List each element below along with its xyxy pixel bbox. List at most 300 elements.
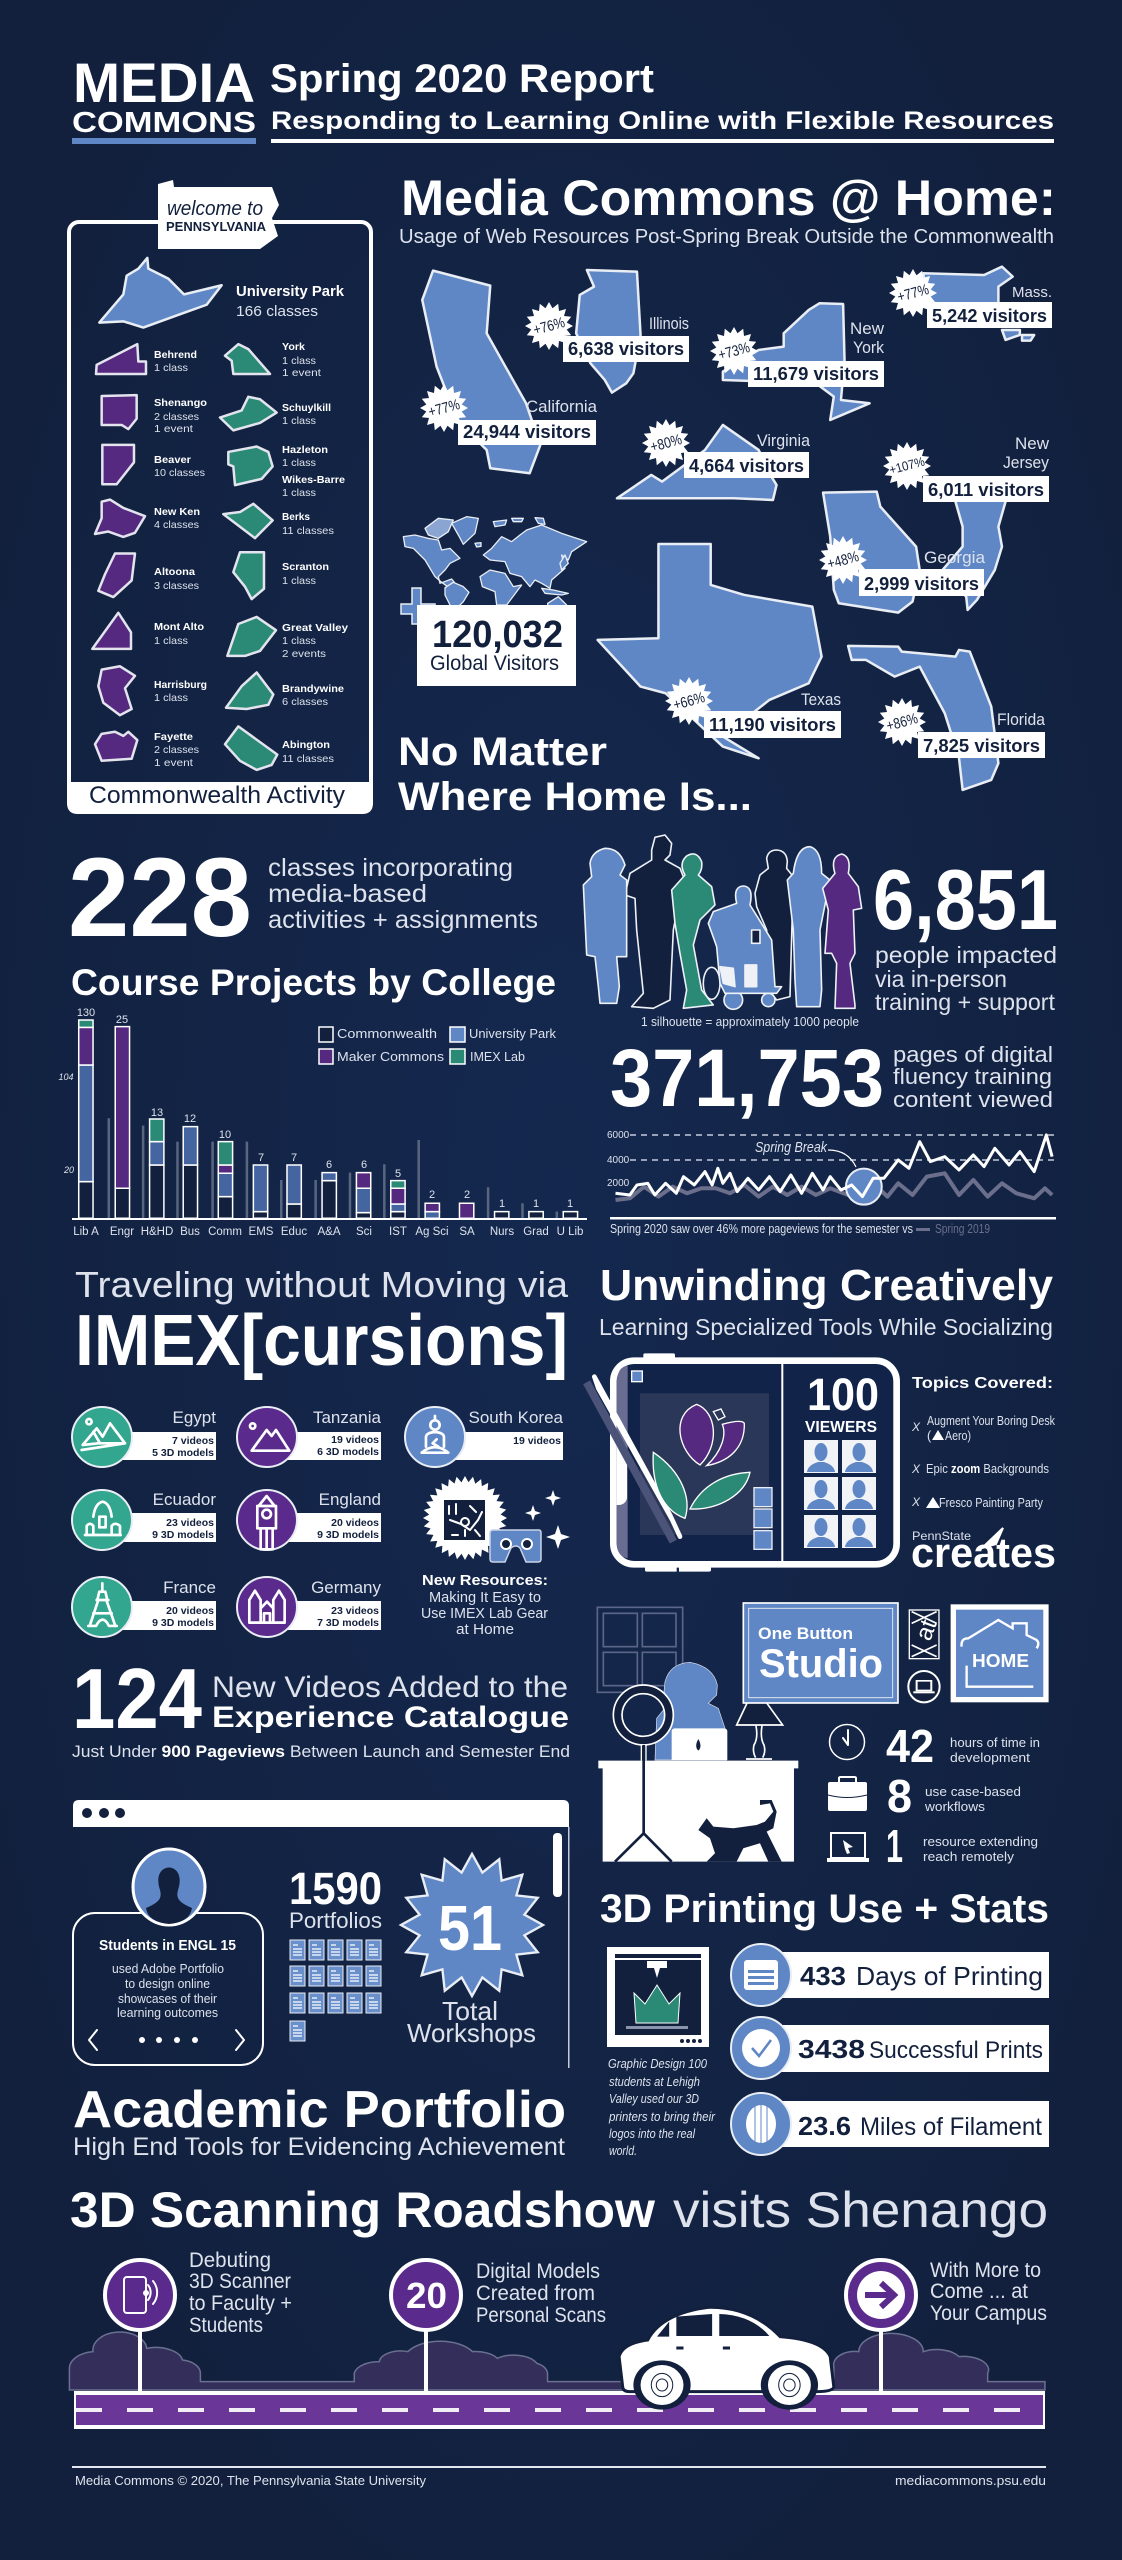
road signs bbox=[105, 2249, 1047, 2392]
value labels: 1 bbox=[533, 1198, 539, 1210]
heading: no matter where home is bbox=[398, 730, 752, 819]
france: 20 videos bbox=[166, 1605, 214, 1617]
campus labels: 1 class bbox=[282, 355, 316, 367]
campus labels: Abington bbox=[282, 739, 330, 751]
window bbox=[597, 1607, 683, 1692]
days of printing: 433 bbox=[800, 1961, 846, 1991]
heading: media commons at home: Usage of Web Resources Post-Spring Break Outside the Commonwealth bbox=[399, 226, 1054, 248]
heading: academic portfolio: High End Tools for Evidencing Achievement bbox=[73, 2133, 565, 2161]
heading: unwinding creatively: Learning Specialized Tools While Socializing bbox=[599, 1314, 1053, 1340]
printing stats bbox=[731, 1944, 1049, 2155]
topics covered: X bbox=[911, 1420, 921, 1434]
college labels: EMS bbox=[249, 1226, 274, 1238]
illinois: Illinois bbox=[649, 314, 689, 333]
heading: course projects: Course Projects by College bbox=[71, 962, 556, 1003]
new jersey: 6,011 visitors bbox=[928, 480, 1044, 500]
studio stats: development bbox=[950, 1750, 1030, 1765]
stat: 1590 portfolios bbox=[289, 1863, 382, 2041]
studio stats: resource extending bbox=[923, 1834, 1038, 1849]
campus labels: 1 event bbox=[154, 757, 193, 769]
studio stats: use case-based bbox=[925, 1784, 1021, 1799]
new resources: Making It Easy to bbox=[429, 1589, 541, 1606]
college labels: Nurs bbox=[490, 1226, 514, 1238]
virginia bbox=[642, 419, 811, 478]
value labels: 104 bbox=[58, 1072, 74, 1082]
world map bbox=[403, 517, 587, 617]
germany: 23 videos bbox=[331, 1605, 379, 1617]
college labels: Engr bbox=[110, 1226, 134, 1238]
stat: 228 classes: 228 bbox=[68, 835, 252, 960]
sign: more to come: Your Campus bbox=[930, 2302, 1047, 2325]
line chart: 4000 bbox=[607, 1155, 630, 1166]
icon: tulip bbox=[653, 1404, 750, 1518]
stat: 228 classes: classes incorporating bbox=[268, 854, 513, 882]
value labels bbox=[58, 1007, 573, 1210]
profile card: to design online bbox=[125, 1976, 210, 1991]
campus labels: 2 events bbox=[282, 648, 326, 660]
printer caption: Graphic Design 100 bbox=[608, 2056, 708, 2071]
campus labels: Brandywine bbox=[282, 683, 344, 695]
legend bbox=[319, 1026, 556, 1064]
lamp bbox=[737, 1698, 783, 1759]
welcome sign: welcome to bbox=[167, 198, 263, 220]
sign: more to come: With More to bbox=[930, 2259, 1041, 2282]
stat: 124 videos: Just Under 900 Pageviews Between Launch and Semester End bbox=[72, 1742, 570, 1761]
legend: IMEX Lab bbox=[470, 1049, 525, 1064]
value labels: 2 bbox=[464, 1189, 470, 1201]
stat: 6851 people: 6,851 bbox=[873, 853, 1058, 948]
heading: no matter where home is: Where Home Is... bbox=[398, 775, 752, 819]
printer caption bbox=[608, 2056, 716, 2158]
line chart: Spring Break bbox=[755, 1139, 828, 1156]
profile card: showcases of their bbox=[118, 1991, 218, 2006]
state callouts bbox=[420, 269, 1052, 758]
printer illustration bbox=[607, 1947, 709, 2047]
car bbox=[619, 2307, 834, 2410]
value labels: 7 bbox=[258, 1152, 264, 1164]
global visitors: 120,032 bbox=[432, 614, 563, 656]
egypt: Egypt bbox=[173, 1408, 216, 1427]
studio stats: 42 bbox=[886, 1720, 934, 1772]
caption: scanner: 3D Scanner bbox=[189, 2270, 291, 2293]
campus labels: 11 classes bbox=[282, 525, 334, 537]
campus labels: 1 class bbox=[282, 457, 316, 469]
legend: Maker Commons bbox=[337, 1049, 445, 1064]
college labels: Bus bbox=[180, 1226, 200, 1238]
successful prints: 3438 bbox=[798, 2034, 865, 2064]
stat: 6851 people: via in-person bbox=[875, 966, 1007, 992]
england: 9 3D models bbox=[317, 1529, 379, 1541]
value labels: 1 bbox=[499, 1198, 505, 1210]
tanzania: 6 3D models bbox=[317, 1446, 379, 1458]
global visitors: Global Visitors bbox=[430, 652, 559, 675]
topics covered: PennState bbox=[912, 1529, 971, 1543]
heading: imexcursions: Traveling without Moving via bbox=[75, 1264, 569, 1305]
line chart: 6000 bbox=[607, 1130, 630, 1141]
new york bbox=[710, 319, 885, 387]
new resources: at Home bbox=[456, 1621, 514, 1638]
value labels: 130 bbox=[77, 1007, 95, 1019]
value labels: 1 bbox=[567, 1198, 573, 1210]
sign: 20 models: Created from bbox=[476, 2282, 595, 2305]
egypt bbox=[72, 1407, 216, 1467]
icon: briefcase bbox=[828, 1777, 867, 1811]
printer caption: Valley used our 3D bbox=[609, 2091, 699, 2106]
sign: 3d scanner bbox=[105, 2260, 175, 2392]
header logo: COMMONS bbox=[72, 107, 256, 139]
stat: 6851 people: people impacted bbox=[875, 942, 1057, 968]
welcome sign: PENNSYLVANIA bbox=[166, 219, 267, 234]
stat: 228 classes bbox=[68, 835, 538, 960]
heading: academic portfolio: Academic Portfolio bbox=[73, 2081, 566, 2139]
florida: Florida bbox=[997, 710, 1045, 729]
campus labels: 1 class bbox=[282, 487, 316, 499]
new york: 11,679 visitors bbox=[753, 364, 879, 384]
heading: 3d scanning roadshow: visits Shenango bbox=[673, 2182, 1048, 2238]
germany bbox=[237, 1577, 381, 1637]
stat: 371753 pages bbox=[610, 1033, 1053, 1124]
miles of filament: 23.6 bbox=[798, 2111, 851, 2141]
tablet illustration: 100 bbox=[807, 1369, 879, 1420]
georgia: Georgia bbox=[924, 548, 986, 567]
college labels: Ag Sci bbox=[415, 1226, 449, 1238]
college labels bbox=[73, 1226, 583, 1238]
studio stats: hours of time in bbox=[950, 1735, 1040, 1750]
college labels: U Lib bbox=[557, 1226, 583, 1238]
france: France bbox=[163, 1578, 216, 1597]
report title: Spring 2020 Report bbox=[270, 57, 654, 101]
line chart: Spring 2020 saw over 46% more pageviews for the semester vs bbox=[610, 1222, 913, 1236]
campus labels: 1 class bbox=[154, 692, 188, 704]
georgia bbox=[819, 536, 986, 596]
california bbox=[420, 384, 598, 445]
college labels: H&HD bbox=[141, 1226, 173, 1238]
viewer avatars bbox=[804, 1440, 876, 1548]
college labels: Educ bbox=[281, 1226, 307, 1238]
campus labels: Wikes-Barre bbox=[282, 474, 345, 486]
stat: 6851 people: training + support bbox=[875, 989, 1056, 1015]
florida bbox=[878, 698, 1045, 758]
heading: imexcursions: IMEX[cursions] bbox=[75, 1301, 568, 1381]
france bbox=[72, 1577, 216, 1637]
campus labels: 1 event bbox=[282, 367, 321, 379]
georgia: +48% bbox=[825, 548, 861, 573]
egypt: 5 3D models bbox=[152, 1447, 214, 1459]
tanzania: Tanzania bbox=[313, 1408, 382, 1427]
one button studio scene bbox=[597, 1603, 1046, 1862]
heading: imexcursions bbox=[75, 1264, 569, 1381]
campus labels: 1 class bbox=[154, 635, 188, 647]
line chart: 2000 bbox=[607, 1178, 630, 1189]
college labels: Lib A bbox=[73, 1226, 99, 1238]
sign: 20 models: Personal Scans bbox=[476, 2304, 606, 2327]
successful prints bbox=[731, 2017, 1049, 2079]
profile card: Students in ENGL 15 bbox=[99, 1938, 236, 1954]
stat: 6851 people bbox=[873, 853, 1058, 1015]
topics covered: X bbox=[911, 1495, 921, 1509]
icon: clock bbox=[830, 1724, 864, 1760]
stat: 371753 pages: content viewed bbox=[893, 1087, 1053, 1112]
massachusetts: Mass. bbox=[1012, 284, 1052, 301]
desk with tripod and cat bbox=[598, 1745, 798, 1862]
successful prints: Successful Prints bbox=[869, 2037, 1043, 2064]
miles of filament bbox=[731, 2093, 1049, 2155]
printer caption: logos into the real bbox=[609, 2126, 696, 2141]
laptop badge bbox=[908, 1671, 940, 1702]
england: 20 videos bbox=[331, 1517, 379, 1529]
studio stats bbox=[827, 1720, 1040, 1872]
texas: Texas bbox=[801, 690, 841, 709]
header logo: MEDIA bbox=[73, 51, 255, 114]
header logo bbox=[72, 51, 256, 144]
panel: commonwealth activity bbox=[67, 180, 373, 814]
campus labels: Scranton bbox=[282, 561, 329, 573]
profile card: used Adobe Portfolio bbox=[112, 1961, 224, 1976]
virginia: 4,664 visitors bbox=[689, 456, 804, 476]
topics covered: ( bbox=[927, 1429, 932, 1443]
campus labels: Schuylkill bbox=[282, 402, 331, 414]
ring light bbox=[613, 1685, 673, 1761]
sign: more to come: Come ... at bbox=[930, 2280, 1028, 2303]
virginia: Virginia bbox=[757, 431, 811, 450]
value labels: 25 bbox=[116, 1014, 128, 1026]
printer caption: students at Lehigh bbox=[609, 2074, 700, 2089]
campus labels: Behrend bbox=[154, 349, 197, 361]
south korea: 19 videos bbox=[513, 1435, 561, 1447]
stat: 228 classes: activities + assignments bbox=[268, 906, 538, 934]
one button studio scene: at bbox=[910, 1616, 943, 1644]
topics covered: Aero) bbox=[945, 1429, 971, 1443]
at tile bbox=[909, 1610, 939, 1659]
caption: scanner: to Faculty + bbox=[189, 2292, 292, 2315]
heading: media commons at home bbox=[399, 170, 1056, 248]
days of printing: Days of Printing bbox=[856, 1961, 1043, 1991]
campus labels: 1 class bbox=[282, 635, 316, 647]
new york: +73% bbox=[716, 339, 752, 364]
campus labels: 10 classes bbox=[154, 467, 205, 479]
value labels: 2 bbox=[429, 1189, 435, 1201]
heading: unwinding creatively: Unwinding Creatively bbox=[600, 1261, 1054, 1310]
sign: 20 models: 20 bbox=[406, 2275, 447, 2316]
state maps bbox=[422, 267, 1034, 790]
report title bbox=[270, 57, 1054, 143]
line chart: Spring 2019 bbox=[935, 1222, 990, 1236]
massachusetts bbox=[889, 269, 1052, 328]
heading: 3d scanning roadshow: 3D Scanning Roadshow bbox=[70, 2182, 655, 2238]
college labels: IST bbox=[389, 1226, 407, 1238]
topics covered: creates bbox=[911, 1529, 1056, 1576]
footer bbox=[72, 2466, 1046, 2488]
campus labels: New Ken bbox=[154, 506, 200, 518]
miles of filament: Miles of Filament bbox=[860, 2113, 1042, 2141]
global visitors bbox=[401, 588, 576, 686]
college labels: Grad bbox=[523, 1226, 549, 1238]
stat: 51 workshops: 51 bbox=[438, 1892, 502, 1964]
stat: 371753 pages: 371,753 bbox=[610, 1033, 884, 1124]
heading: 3d printing: 3D Printing Use + Stats bbox=[600, 1887, 1049, 1931]
new jersey bbox=[883, 434, 1050, 502]
studio stats: 8 bbox=[887, 1770, 912, 1822]
stat: 124 videos: Experience Catalogue bbox=[212, 1701, 569, 1734]
campus labels: Altoona bbox=[154, 566, 195, 578]
wheelchair user bbox=[703, 886, 782, 1009]
value labels: 5 bbox=[395, 1168, 401, 1180]
college labels: A&A bbox=[317, 1226, 341, 1238]
campus labels: 1 class bbox=[154, 362, 188, 374]
value labels: 10 bbox=[219, 1129, 231, 1141]
new york: New bbox=[850, 319, 885, 338]
campus labels: 2 classes bbox=[154, 411, 199, 423]
new resources: New Resources: bbox=[422, 1572, 548, 1589]
home sign bbox=[953, 1607, 1046, 1700]
ecuador bbox=[72, 1490, 216, 1550]
imex destinations bbox=[72, 1407, 564, 1637]
road bbox=[74, 2391, 1045, 2429]
college labels: Sci bbox=[356, 1226, 372, 1238]
campus labels: 1 class bbox=[282, 415, 316, 427]
england: England bbox=[319, 1490, 381, 1509]
stat: 124 videos bbox=[72, 1652, 570, 1761]
california: California bbox=[526, 397, 598, 416]
campus labels: 1 class bbox=[282, 575, 316, 587]
illinois bbox=[525, 302, 689, 362]
stat: 1590 portfolios: Portfolios bbox=[289, 1908, 382, 1933]
studio stats: workflows bbox=[924, 1799, 986, 1814]
stat: 51 workshops bbox=[401, 1854, 543, 2048]
silhouette caption: 1 silhouette = approximately 1000 people bbox=[641, 1014, 859, 1029]
virginia: +80% bbox=[648, 431, 684, 456]
value labels: 6 bbox=[361, 1159, 367, 1171]
stat: 51 workshops: Workshops bbox=[407, 2018, 536, 2048]
studio stats: reach remotely bbox=[923, 1849, 1015, 1864]
campus labels: Berks bbox=[282, 511, 310, 523]
sign: 20 models: Digital Models bbox=[476, 2260, 600, 2283]
south korea bbox=[405, 1407, 564, 1467]
campus labels: Shenango bbox=[154, 397, 207, 409]
heading: media commons at home: Media Commons @ Home: bbox=[401, 170, 1056, 226]
presenter bbox=[655, 1662, 727, 1760]
campus labels: 3 classes bbox=[154, 580, 199, 592]
california: +77% bbox=[426, 396, 462, 421]
report title: Responding to Learning Online with Flexible Resources bbox=[271, 107, 1054, 135]
silhouettes bbox=[583, 835, 862, 1009]
one button studio scene: HOME bbox=[972, 1651, 1029, 1671]
heading: unwinding creatively bbox=[599, 1261, 1054, 1340]
value labels: 7 bbox=[291, 1152, 297, 1164]
campus labels: 2 classes bbox=[154, 744, 199, 756]
massachusetts: +77% bbox=[895, 281, 931, 306]
new york: York bbox=[853, 338, 884, 357]
florida: 7,825 visitors bbox=[923, 736, 1040, 756]
texas: 11,190 visitors bbox=[709, 715, 836, 735]
topics covered: Augment Your Boring Desk bbox=[927, 1414, 1056, 1428]
campus labels: 6 classes bbox=[282, 696, 328, 708]
college labels: SA bbox=[459, 1226, 475, 1238]
studio sign bbox=[743, 1603, 898, 1703]
topics covered bbox=[911, 1375, 1056, 1576]
stat: 51 workshops: Total bbox=[442, 1996, 498, 2026]
south korea: South Korea bbox=[468, 1408, 564, 1427]
campus labels: 1 event bbox=[154, 423, 193, 435]
georgia: 2,999 visitors bbox=[864, 574, 979, 594]
egypt: 7 videos bbox=[172, 1435, 214, 1447]
heading: academic portfolio bbox=[73, 2081, 566, 2161]
profile card: learning outcomes bbox=[117, 2005, 218, 2020]
legend: University Park bbox=[469, 1026, 556, 1041]
campus labels: University Park bbox=[236, 284, 345, 300]
icon: laptop bbox=[827, 1833, 869, 1862]
sign: more to come bbox=[846, 2259, 1047, 2392]
campus labels: Mont Alto bbox=[154, 621, 204, 633]
value labels: 6 bbox=[326, 1159, 332, 1171]
massachusetts: 5,242 visitors bbox=[932, 306, 1047, 326]
campus labels: Hazleton bbox=[282, 444, 328, 456]
bar chart bbox=[58, 1007, 587, 1238]
campus shapes bbox=[92, 258, 277, 770]
florida: +86% bbox=[884, 710, 920, 735]
topics covered: Topics Covered: bbox=[912, 1375, 1053, 1392]
texas bbox=[665, 677, 841, 738]
footer: Media Commons © 2020, The Pennsylvania State University bbox=[75, 2473, 426, 2488]
road signs: Debuting bbox=[189, 2249, 271, 2272]
campus labels: Fayette bbox=[154, 731, 193, 743]
browser window bbox=[73, 1800, 570, 2068]
icon: vr cards bbox=[416, 1469, 570, 1567]
caption: scanner: Students bbox=[189, 2314, 263, 2337]
laptop bbox=[672, 1728, 727, 1760]
legend: Commonwealth bbox=[337, 1026, 437, 1041]
tanzania bbox=[237, 1407, 382, 1467]
campus labels: 4 classes bbox=[154, 519, 199, 531]
california: 24,944 visitors bbox=[463, 422, 591, 442]
campus labels: York bbox=[282, 341, 305, 353]
value labels: 12 bbox=[184, 1113, 196, 1125]
topics covered: Epic zoom Backgrounds bbox=[926, 1462, 1049, 1476]
heading: 3d scanning roadshow bbox=[70, 2182, 1048, 2238]
stat: 124 videos: New Videos Added to the bbox=[212, 1671, 568, 1704]
footer: mediacommons.psu.edu bbox=[895, 2473, 1046, 2488]
tanzania: 19 videos bbox=[331, 1434, 379, 1446]
new jersey: +107% bbox=[888, 454, 927, 477]
england bbox=[237, 1490, 381, 1550]
tablet illustration bbox=[587, 1353, 897, 1572]
illinois: +76% bbox=[531, 314, 567, 339]
welcome sign bbox=[158, 180, 279, 249]
printer caption: world. bbox=[609, 2143, 637, 2158]
profile card bbox=[73, 1849, 263, 2065]
stat: 1590 portfolios: 1590 bbox=[289, 1863, 382, 1914]
line chart bbox=[607, 1130, 1056, 1236]
new jersey: Jersey bbox=[1003, 453, 1049, 472]
campus labels: Great Valley bbox=[282, 622, 348, 634]
bushes bbox=[69, 2332, 1045, 2390]
one button studio scene: Studio bbox=[759, 1642, 883, 1686]
caption: scanner bbox=[189, 2270, 292, 2337]
college labels: Comm bbox=[208, 1226, 242, 1238]
value labels: 20 bbox=[63, 1165, 74, 1175]
sign: 20 models bbox=[391, 2260, 606, 2392]
days of printing bbox=[731, 1944, 1049, 2006]
ecuador: 9 3D models bbox=[152, 1529, 214, 1541]
campus labels: Harrisburg bbox=[154, 679, 207, 691]
one button studio scene: One Button bbox=[758, 1624, 853, 1643]
value labels: 13 bbox=[151, 1107, 163, 1119]
campus labels: 11 classes bbox=[282, 753, 334, 765]
studio stats: 1 bbox=[886, 1820, 903, 1872]
new jersey: New bbox=[1015, 434, 1050, 453]
campus labels bbox=[154, 284, 348, 769]
ecuador: Ecuador bbox=[153, 1490, 216, 1509]
